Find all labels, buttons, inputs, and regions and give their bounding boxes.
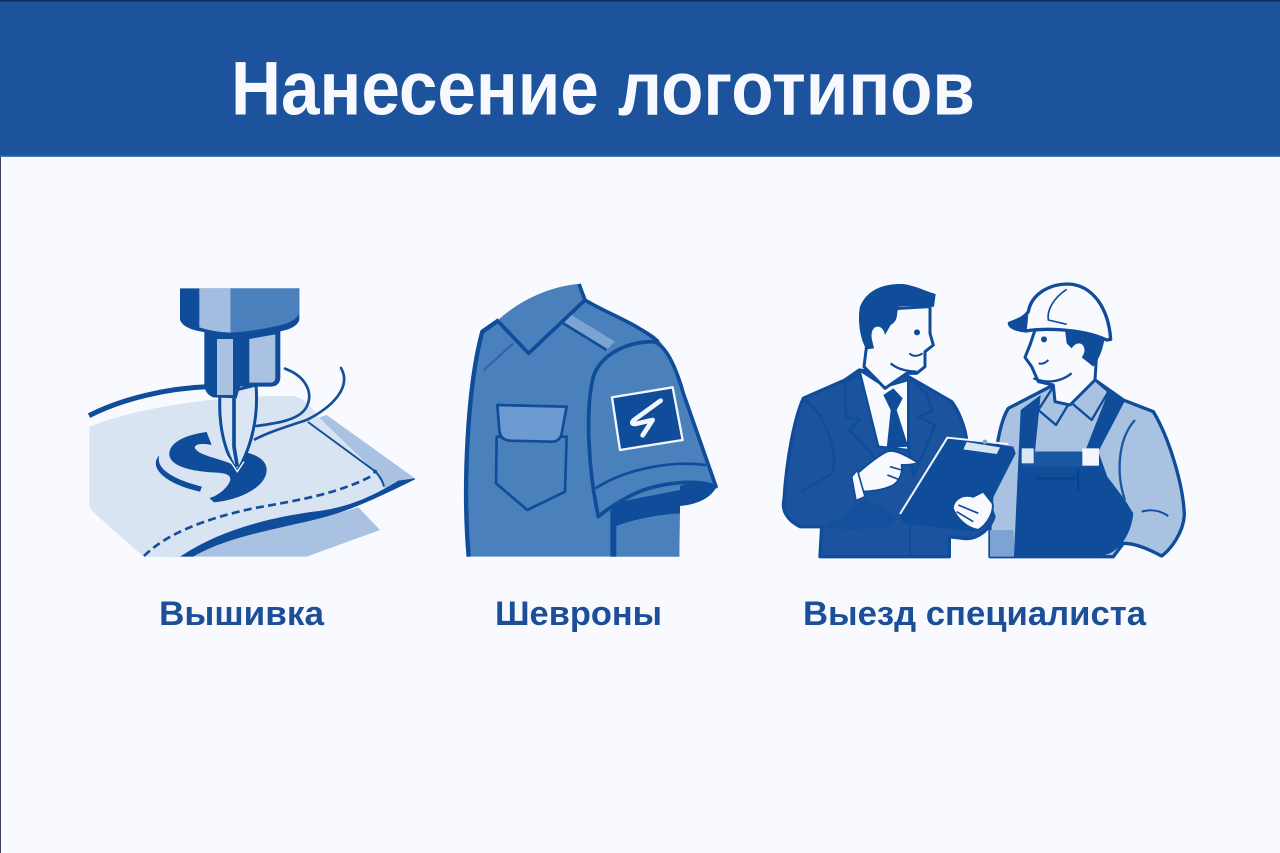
header band (0, 0, 1280, 157)
manager hand holding clipboard (953, 492, 993, 530)
fabric underside (180, 507, 380, 557)
worker overalls (1014, 392, 1133, 557)
chevron patch (612, 387, 683, 450)
worker sleeve fold (1120, 420, 1135, 500)
icon: embroidery machine needle stitching a logo on fabric (89, 288, 415, 557)
needle clamp (204, 327, 280, 398)
chest pocket (496, 405, 567, 510)
fabric folded flap (307, 415, 415, 492)
dashed stitch line (144, 475, 373, 556)
manager shirt and tie (859, 370, 908, 450)
worker torso and arm (990, 380, 1184, 557)
worker collar (1038, 380, 1108, 425)
threads (257, 369, 309, 426)
clipboard clip (963, 442, 1000, 454)
fabric top hem (89, 387, 208, 416)
sleeve (589, 342, 716, 517)
manager hair (859, 284, 936, 349)
worker hair (1065, 330, 1105, 367)
icon: manager and worker reviewing a clipboard (783, 284, 1184, 557)
forearm and lining (612, 492, 680, 557)
manager (783, 284, 994, 557)
machine head (180, 288, 299, 335)
manager pointing hand (857, 451, 918, 492)
fabric edge (180, 478, 415, 557)
label: specialist visit: Выезд специалиста (803, 595, 1147, 633)
embroidered logo (156, 432, 267, 502)
shoulder strap (563, 315, 615, 350)
fabric seam (308, 422, 384, 487)
shirt body (465, 284, 716, 557)
label: embroidery: Вышивка (159, 595, 325, 633)
manager neck and face (864, 307, 933, 388)
clipboard (899, 437, 1016, 532)
needle (220, 385, 257, 472)
manager lapels (845, 375, 883, 467)
overall buttons (1022, 448, 1034, 463)
label: chevrons: Шевроны (495, 595, 662, 633)
fabric panel (89, 396, 385, 557)
hard hat (1009, 284, 1111, 340)
title: Нанесение логотипов (231, 46, 975, 132)
worker neck and face (1025, 327, 1098, 405)
patch lightning logo (632, 401, 661, 435)
manager jacket (783, 370, 994, 557)
worker (990, 284, 1184, 557)
icon: uniform shirt with chevron patch (465, 284, 717, 557)
collar (498, 284, 585, 353)
